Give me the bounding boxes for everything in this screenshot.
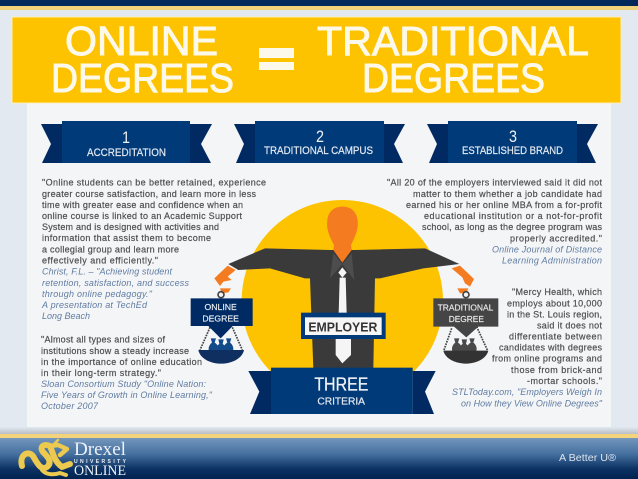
quote: mercy health: in the St. Louis region, [507,309,602,319]
quote: online students: Christ, F.L. – "Achieving student [42,266,172,276]
scale rings and chains [200,292,487,350]
quote: all 20 employers: Learning Administration [502,255,602,265]
traditional degree tag: DEGREE [449,314,484,324]
head [327,207,358,263]
quote: online students: "Online students can be better retained, experience [42,178,266,188]
employer body [228,248,459,368]
online degree tag: DEGREE [202,313,239,323]
logo wordmark: ONLINE [74,463,126,479]
three criteria banner: THREE [314,374,368,395]
quote: all 20 employers [387,178,602,265]
quote: mercy health: on How they View Online Degrees" [461,398,603,408]
ribbon 1: accreditation [41,121,212,163]
quote: all 20 employers: earned his or her online MBA from a for-profit [406,200,602,210]
ribbon 2: traditional campus [234,121,405,163]
quote: mercy health: -mortar schools." [527,376,602,386]
quote: online students: Long Beach [42,311,90,321]
employer sign [301,313,386,339]
quote: all 20 employers: "All 20 of the employers interviewed said it did not [387,178,602,188]
top header bar [0,0,638,10]
logo wordmark: Drexel [74,439,126,460]
quote: mercy health [452,287,603,408]
tagline: A Better U® [559,452,616,464]
quote: almost all types: Five Years of Growth in Online Learning," [41,390,213,400]
title: online degrees: DEGREES [51,55,234,101]
lapels [330,253,354,280]
logo wordmark [74,439,127,479]
ribbon 3: established brand: 3 [509,127,517,146]
title: traditional degrees [317,18,589,101]
quote: almost all types: in their long-term strategy." [41,368,161,378]
quote: online students: through online pedagogy." [42,289,153,299]
quote: mercy health: from online programs and [492,354,602,364]
money bags [209,338,219,355]
content panel [27,103,611,427]
online degree tag [191,298,253,338]
title banner [12,17,621,103]
title: online degrees [51,18,234,101]
left hand [214,266,236,293]
icon: dragon logo [21,440,70,475]
equals sign [259,48,294,70]
three criteria banner [248,368,436,414]
traditional degree scale pan [443,338,488,364]
online degree tag: ONLINE [205,302,237,312]
online degree scale pan [198,338,244,364]
tie [336,267,351,363]
quote: all 20 employers: school, as long as the degree program was [422,222,602,232]
traditional degree tag: TRADITIONAL [438,302,494,312]
ribbon 2: traditional campus: 2 [316,127,324,146]
right hand [452,266,474,293]
quote: almost all types [41,334,213,411]
title: traditional degrees: TRADITIONAL [317,18,589,64]
quote: online students: greater course satisfaction, and learn more in less [42,189,256,199]
quote: mercy health: those from brick-and [511,365,602,375]
quote: almost all types: in the importance of online education [41,357,202,367]
title: traditional degrees: DEGREES [362,55,545,101]
quote: almost all types: institutions show a steady increase [41,346,189,356]
quote: all 20 employers: Online Journal of Distance [492,244,602,254]
quote: online students: effectively and efficiently." [42,255,158,265]
logo wordmark: UNIVERSITY [74,459,127,465]
quote: mercy health: "Mercy Health, which [512,287,602,297]
traditional money bags [452,338,462,355]
quote: all 20 employers: properly accredited." [510,233,602,243]
quote: online students: System and is designed with activities and [42,222,219,232]
quote: all 20 employers: matter to them whether a job candidate had [413,189,602,199]
quote: mercy health: differentiate between [509,331,602,341]
ribbon 1: accreditation: 1 [122,128,130,147]
quote: online students: a collegial group and learn more [42,244,179,254]
quote: online students: A presentation at TechEd [41,300,148,310]
three criteria banner: CRITERIA [317,396,365,407]
ribbon 1: accreditation: ACCREDITATION [87,147,166,159]
ribbon 3: established brand [427,121,598,163]
quote: almost all types: October 2007 [41,401,99,411]
quote: almost all types: Sloan Consortium Study "Online Nation: [41,379,206,389]
title: online degrees: ONLINE [65,18,218,64]
ribbon 3: established brand: ESTABLISHED BRAND [462,145,563,157]
quote: almost all types: "Almost all types and sizes of [41,334,165,344]
quote: online students [41,178,266,321]
employer sign: EMPLOYER [308,320,377,334]
central figure [191,200,498,414]
quote: all 20 employers: educational institution or a not-for-profit [424,211,602,221]
quote: mercy health: said it does not [537,320,602,330]
quote: mercy health: STLToday.com, "Employers Weigh In [452,387,602,397]
traditional degree tag [433,298,498,337]
quote: mercy health: candidates with degrees [499,343,602,353]
quote: mercy health: employs about 10,000 [507,298,602,308]
ribbon 2: traditional campus: TRADITIONAL CAMPUS [264,145,373,157]
quote: online students: time with greater ease and confidence when an [42,200,243,210]
yellow circle [242,200,443,401]
footer [0,427,638,479]
quote: online students: online course is linked to an Academic Support [42,211,242,221]
quote: online students: information that assist them to become [42,233,211,243]
quote: online students: retention, satisfaction, and success [42,278,190,288]
